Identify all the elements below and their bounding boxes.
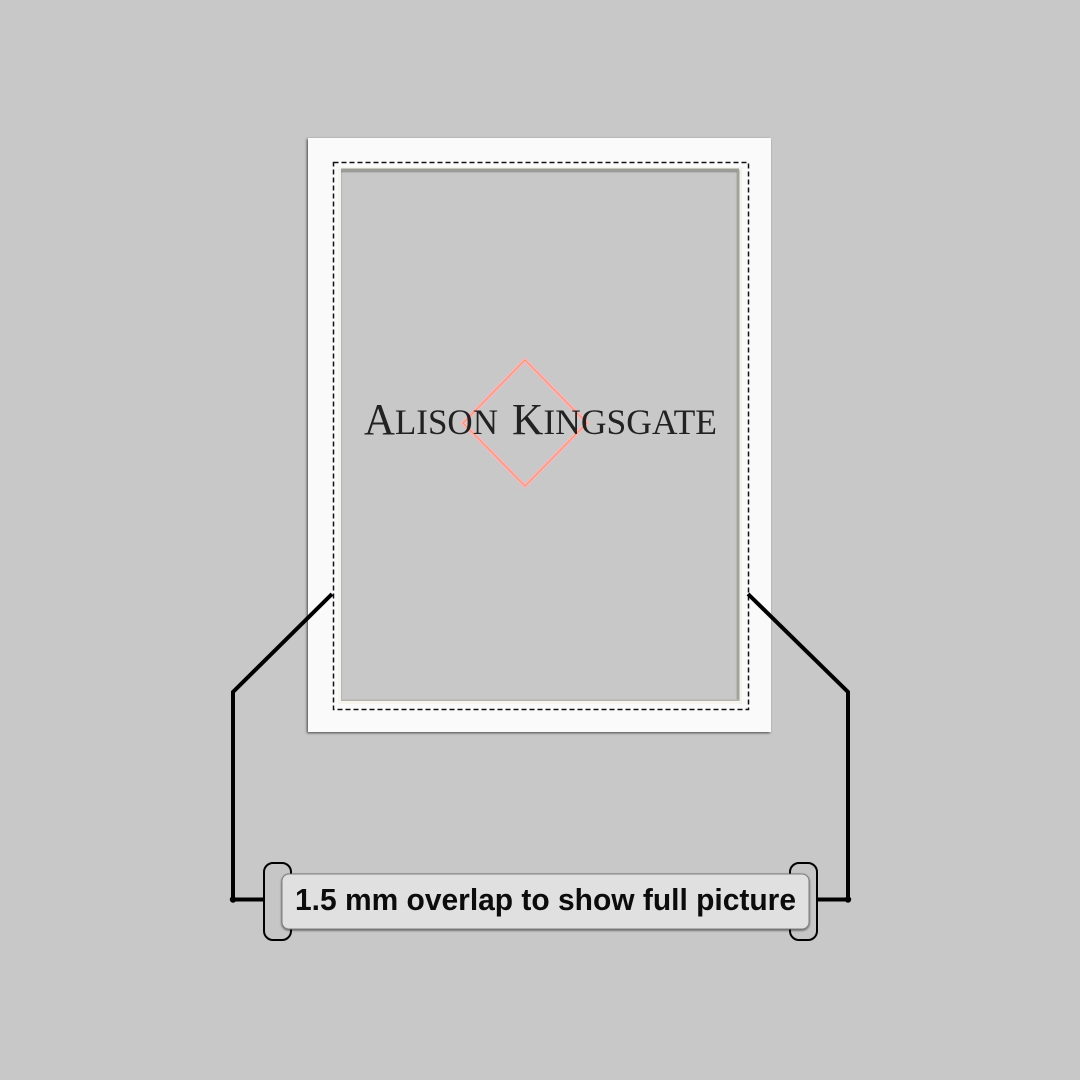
label text: 1.5 mm overlap to show full picture <box>295 882 796 917</box>
arrow: right leader line <box>748 594 851 903</box>
logo text: last name: KINGSGATE <box>512 395 717 444</box>
icon: pink diamond <box>463 360 587 486</box>
left bracket tab <box>264 863 291 940</box>
panel: white picture mount frame <box>308 138 771 732</box>
logo: Alison Kingsgate <box>364 360 717 486</box>
callout: overlap label <box>264 863 817 940</box>
logo text: first name: ALISON <box>364 395 498 444</box>
inner opening edge shading <box>338 167 742 704</box>
dashed overlap line <box>334 162 748 710</box>
arrow: left leader line <box>230 594 332 903</box>
right bracket tab <box>790 863 817 940</box>
label plate <box>282 874 809 929</box>
